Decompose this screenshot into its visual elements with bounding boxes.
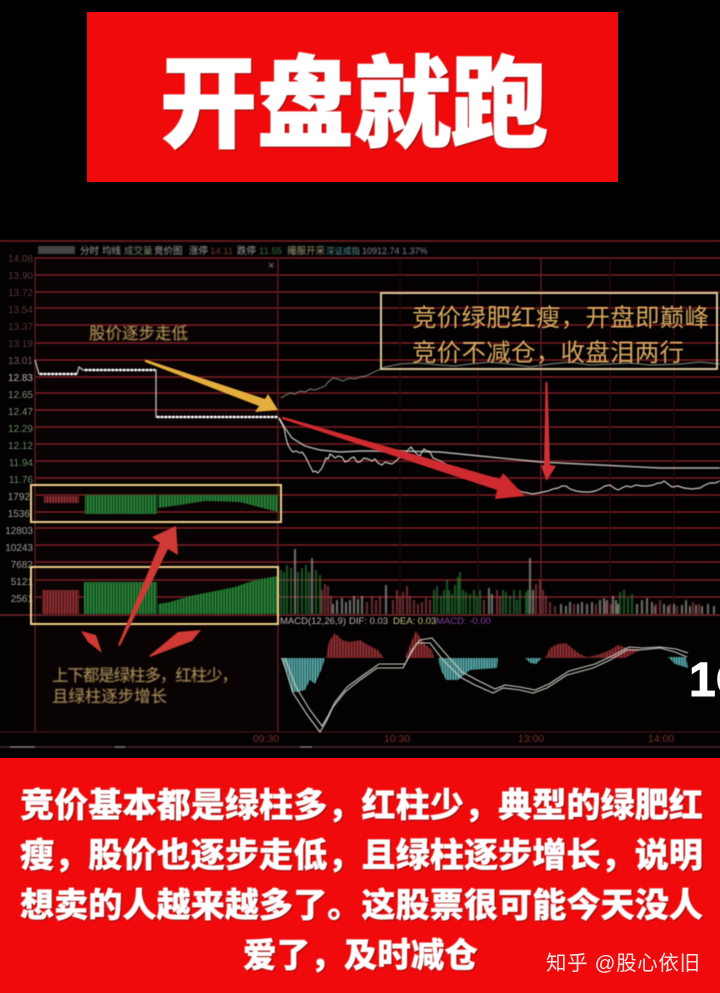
chart toolbar: 涨停 (189, 245, 209, 257)
price axis labels: 14.08 (8, 254, 33, 265)
price axis labels: 10243 (5, 543, 33, 554)
chart toolbar: 均线 (102, 245, 122, 257)
chart toolbar: 跌停 (237, 245, 257, 257)
price axis labels: 1536 (8, 509, 30, 520)
bottom explanation panel (0, 758, 720, 993)
price axis labels: 12.65 (8, 390, 33, 401)
average price line (279, 418, 720, 468)
callout: auction warning: 竞价绿肥红瘦，开盘即巅峰 (412, 304, 709, 332)
price axis labels: 12.83 (8, 373, 33, 384)
explanation text (20, 787, 703, 975)
price axis labels: 13.54 (8, 305, 33, 316)
annotation: bars note: 上下都是绿柱多，红柱少， (52, 666, 238, 685)
stock chart (0, 240, 720, 755)
chart toolbar: × (268, 260, 274, 272)
price axis labels: 13.01 (8, 356, 33, 367)
title panel (87, 12, 618, 182)
price axis labels: 13.37 (8, 322, 33, 333)
highlight box: lower bars (31, 567, 278, 624)
chart toolbar: 竞价图 (154, 245, 183, 257)
chart toolbar: 14.11 (210, 246, 233, 257)
MACD lines (282, 638, 688, 732)
price axis labels: 5121 (11, 577, 33, 588)
time axis labels: 09:30 (253, 733, 279, 745)
price axis labels: 12.29 (8, 424, 33, 435)
time axis labels (253, 733, 674, 745)
title banner (87, 12, 618, 182)
price axis labels: 13.19 (8, 339, 33, 350)
price axis labels: 12803 (5, 526, 33, 537)
arrow: large red up (118, 526, 178, 646)
annotation: bars note: 且绿柱逐步增长 (52, 687, 167, 706)
callout: auction warning (381, 293, 717, 369)
arrow: red vertical (541, 382, 556, 481)
watermark: 知乎 @股心依旧 (546, 952, 700, 975)
price axis labels: 2561 (11, 594, 33, 605)
explanation text: 瘦，股价也逐步走低，且绿柱逐步增长，说明 (20, 837, 703, 875)
price axis labels: 11.94 (9, 458, 33, 469)
volume bars (281, 549, 714, 614)
chart background (0, 240, 720, 755)
chart toolbar: 分时 (80, 245, 100, 257)
annotation: bars note (52, 666, 238, 706)
callout: auction warning: 竞价不减仓，收盘泪两行 (412, 339, 684, 367)
explanation text: 爱了，及时减仓 (243, 937, 478, 975)
chart toolbar: 10912.74 1.37% (362, 246, 428, 256)
MACD label: DEA: 0.03 (393, 616, 436, 627)
price axis labels: 12.12 (8, 441, 33, 452)
chart toolbar (38, 245, 428, 272)
price axis labels: 7682 (11, 560, 33, 571)
title: 开盘就跑 (160, 49, 548, 161)
chart toolbar: 撮服开采 (287, 245, 326, 257)
MACD label (280, 616, 491, 627)
MACD label: MACD: -0.00 (436, 616, 491, 627)
MACD label: MACD(12,26,9) (280, 616, 346, 627)
time axis labels: 10:30 (384, 733, 410, 745)
auction buy sell bars (bottom) (42, 576, 278, 614)
price axis labels (5, 254, 33, 605)
price axis labels: 1792 (8, 492, 30, 503)
MACD histogram (281, 631, 688, 692)
index line (281, 362, 720, 398)
chart grid (0, 241, 720, 747)
explanation text: 竞价基本都是绿柱多，红柱少，典型的绿肥红 (20, 787, 703, 825)
arrow: small red right (149, 630, 201, 657)
time axis labels: 13:00 (518, 733, 544, 745)
highlight box: upper bars (31, 485, 281, 522)
price axis labels: 13.72 (8, 288, 33, 299)
arrow: yellow price decline (145, 360, 278, 412)
chart toolbar: 成交量 (124, 245, 153, 257)
price axis labels: 11.76 (9, 475, 33, 486)
price axis labels: 13.90 (8, 271, 33, 282)
chart toolbar: 11.55 (259, 246, 282, 257)
annotation: stock price falling: 股价逐步走低 (89, 324, 188, 343)
price line (279, 418, 720, 494)
chart toolbar: 深证成指 (326, 246, 361, 256)
arrow: small red left (81, 631, 102, 653)
price axis labels: 12.47 (8, 407, 33, 418)
time axis labels: 14:00 (648, 733, 674, 745)
MACD label: DIF: 0.03 (349, 616, 388, 627)
auction price line (35, 360, 278, 417)
auction buy sell bars (top) (44, 495, 278, 514)
panel background (0, 758, 720, 993)
arrow: red decline (282, 417, 525, 499)
explanation text: 想卖的人越来越多了。这股票很可能今天没人 (20, 886, 703, 925)
